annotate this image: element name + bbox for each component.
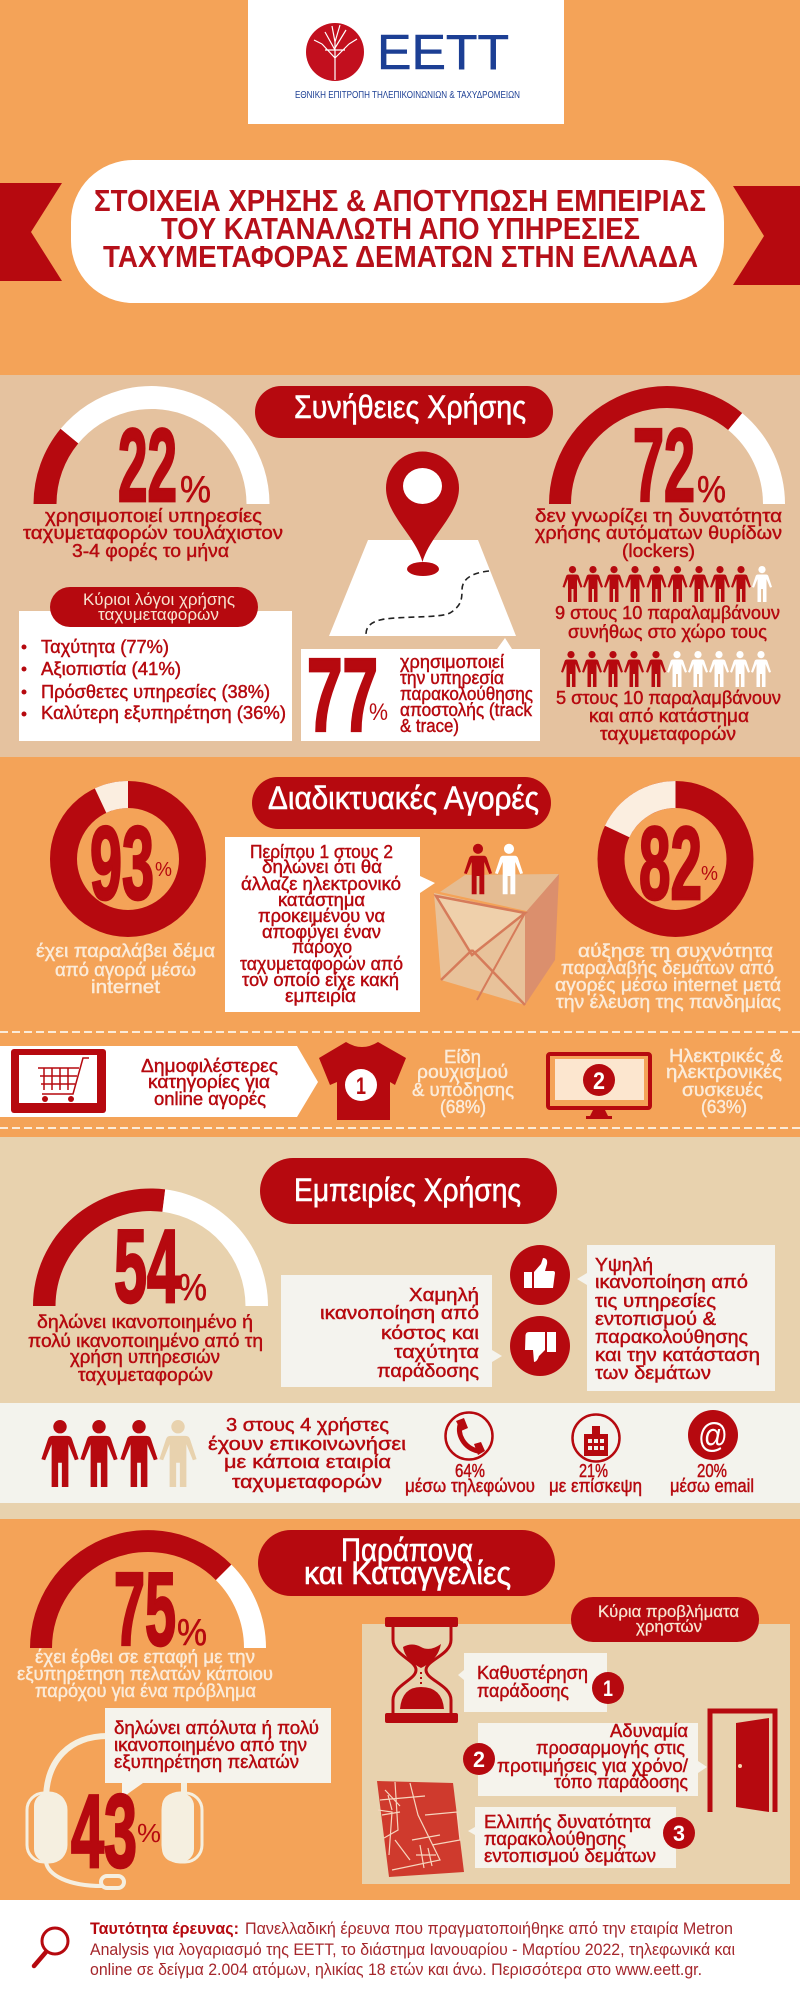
text: 54% description: χρήση υπηρεσιών	[70, 1346, 220, 1367]
banner: popular categories	[0, 1046, 318, 1117]
callout: 43% satisfied with customer service: δηλώνει απόλυτα ή πολύ	[114, 1717, 319, 1738]
callout: 77% track and trace	[301, 638, 540, 754]
title: ΤΟΥ ΚΑΤΑΝΑΛΩΤΗ ΑΠΟ ΥΠΗΡΕΣΙΕΣ	[161, 211, 640, 246]
pictogram: 3 of 4 users	[41, 1420, 197, 1487]
callout: change of store: τον οποίο είχε κακή	[242, 969, 399, 990]
banner: popular categories: online αγορές	[154, 1088, 266, 1109]
text: 22% description: 3-4 φορές το μήνα	[72, 540, 229, 561]
panel: reasons for use: Κύριοι λόγοι χρήσης	[83, 591, 235, 609]
footer text	[90, 1919, 735, 1979]
heading: main problems: χρηστών	[636, 1618, 702, 1636]
text: 5 of 10	[556, 687, 781, 744]
text: 3 of 4 users: με κάποια εταιρία	[224, 1451, 391, 1472]
text: 72% description	[535, 505, 782, 561]
callout: high satisfaction: τις υπηρεσίες	[595, 1290, 716, 1311]
pictogram: 5 of 10	[561, 651, 771, 687]
icon: city map	[377, 1781, 464, 1877]
text: 22% description: χρησιμοποιεί υπηρεσίες	[45, 505, 262, 526]
right ribbon	[733, 186, 800, 285]
footer text: online σε δείγμα 2.004 ατόμων, ηλικίας 18 ετών και άνω. Περισσότερα στο www.eett.gr.	[90, 1960, 702, 1979]
text: 75% description: έχει έρθει σε επαφή με την	[35, 1646, 255, 1667]
logo panel	[248, 0, 564, 124]
text: electronics 63%	[666, 1045, 784, 1117]
callout: delivery delay: παράδοσης	[477, 1680, 569, 1701]
gauge 75%: 75	[114, 1552, 176, 1668]
callout: 77% track and trace: χρησιμοποιεί	[400, 651, 504, 672]
footer text: Πανελλαδική έρευνα που πραγματοποιήθηκε από την εταιρία Metron	[245, 1919, 733, 1938]
illustration: parcel with two people	[434, 844, 559, 1005]
logo wordmark: ΕΕΤΤ	[377, 26, 509, 80]
gauge 72%: %	[697, 469, 726, 511]
text: 75% description: παρόχου για ένα πρόβλημα	[35, 1680, 256, 1701]
gauge 54%: %	[178, 1267, 207, 1309]
callout: 77% track and trace: 77	[307, 638, 378, 754]
stat: 43%: 43	[71, 1774, 137, 1890]
panel: reasons for use: Αξιοπιστία (41%)	[41, 658, 181, 679]
callout: change of store: Περίπου 1 στους 2	[250, 841, 393, 862]
icon: monitor rank 2: 2	[593, 1068, 605, 1095]
gauge 54%: 54	[114, 1209, 180, 1325]
callout: 77% track and trace: & trace)	[400, 715, 459, 736]
callout: high satisfaction: Υψηλή	[595, 1254, 653, 1275]
donut 82%: 82	[639, 806, 702, 922]
stat: 20% by email: μέσω email	[670, 1475, 754, 1496]
text: clothing 68%	[412, 1046, 514, 1117]
text: electronics 63%: ηλεκτρονικές	[666, 1061, 782, 1082]
badge 1	[592, 1672, 624, 1704]
text: 54% description: δηλώνει ικανοποιημένο ή	[37, 1311, 253, 1332]
text: 82% description: παραλαβής δεμάτων από	[561, 957, 774, 978]
panel: reasons for use: Καλύτερη εξυπηρέτηση (36%)	[41, 702, 286, 723]
text: 82% description: την έλευση της πανδημίας	[556, 991, 781, 1012]
callout: change of store: κατάστημα	[278, 889, 365, 910]
callout: high satisfaction	[577, 1245, 775, 1391]
text: 54% description: ταχυμεταφορών	[78, 1364, 213, 1385]
text: 82% description: αγορές μέσω internet μετά	[555, 974, 781, 995]
gauge 22%: %	[180, 469, 211, 511]
callout: change of store	[225, 837, 435, 1012]
text: 3 of 4 users: 3 στους 4 χρήστες	[226, 1414, 389, 1435]
stat: 64% by phone: μέσω τηλεφώνου	[405, 1475, 535, 1496]
callout: high satisfaction: εντοπισμού &	[595, 1308, 717, 1329]
title	[71, 160, 724, 303]
badge 3: 3	[673, 1821, 685, 1846]
gauge 54%	[33, 1188, 268, 1325]
callout: low satisfaction	[281, 1275, 502, 1387]
panel: reasons for use: ταχυμεταφορών	[98, 606, 219, 624]
stat: 21% by visit: με επίσκεψη	[549, 1475, 642, 1496]
badge 2	[463, 1743, 495, 1775]
icon: magnifier	[34, 1928, 68, 1966]
callout: 77% track and trace: %	[369, 699, 388, 726]
gauge 75%	[30, 1530, 266, 1668]
heading	[255, 386, 553, 438]
callout: inability to adjust delivery: προσαρμογής στις	[536, 1737, 685, 1758]
icon: thumbs up	[510, 1245, 570, 1305]
badge 1: 1	[603, 1676, 613, 1701]
text: clothing 68%: (68%)	[440, 1096, 486, 1117]
heading: Παράπονα	[341, 1532, 473, 1568]
icon: building	[572, 1414, 620, 1462]
text: 82% description	[555, 940, 781, 1012]
left ribbon	[0, 183, 62, 281]
text: 3 of 4 users: ταχυμεταφορών	[232, 1471, 382, 1492]
stat: 64% by phone	[405, 1460, 535, 1496]
text: 72% description: χρήσης αυτόματων θυρίδων	[535, 522, 782, 543]
text: 93% description: έχει παραλάβει δέμα	[36, 940, 215, 961]
stat: 64% by phone: 64%	[455, 1460, 485, 1481]
callout: incomplete tracking: παρακολούθησης	[484, 1828, 626, 1849]
text: 75% description: εξυπηρέτηση πελατών κάποιου	[17, 1663, 273, 1684]
icon: email at sign	[688, 1410, 738, 1460]
panel: reasons for use: Ταχύτητα (77%)	[41, 636, 169, 657]
stat: 21% by visit: 21%	[579, 1460, 608, 1481]
pictogram: 9 of 10	[562, 566, 772, 602]
callout: change of store: προκειμένου να	[258, 905, 385, 926]
logo subtitle: ΕΘΝΙΚΗ ΕΠΙΤΡΟΠΗ ΤΗΛΕΠΙΚΟΙΝΩΝΙΩΝ & ΤΑΧΥΔΡΟΜΕΙΩΝ	[295, 89, 520, 101]
icon: t-shirt rank 1: 1	[356, 1073, 366, 1100]
panel: Συνήθειες Χρήσης	[0, 375, 800, 757]
text: electronics 63%: συσκευές	[682, 1079, 763, 1100]
text: clothing 68%: & υπόδησης	[412, 1079, 514, 1100]
donut 93%: %	[155, 859, 172, 881]
callout: incomplete tracking: Ελλιπής δυνατότητα	[484, 1811, 651, 1832]
heading: main problems	[571, 1597, 759, 1642]
text: 72% description: (lockers)	[622, 540, 695, 561]
icon: email at sign: @	[698, 1417, 728, 1455]
panel: Παράπονα και Καταγγελίες	[0, 1519, 800, 1900]
text: 72% description: δεν γνωρίζει τη δυνατότητα	[535, 505, 782, 526]
callout: incomplete tracking: εντοπισμού δεμάτων	[484, 1845, 656, 1866]
callout: high satisfaction: των δεμάτων	[595, 1362, 711, 1383]
callout: 77% track and trace: παρακολούθησης	[400, 683, 533, 704]
icon: hourglass	[385, 1617, 458, 1723]
callout: 43% satisfied with customer service: εξυπηρέτηση πελατών	[114, 1751, 299, 1772]
text: 9 of 10: 9 στους 10 παραλαμβάνουν	[555, 602, 780, 623]
callout: low satisfaction: ταχύτητα	[394, 1341, 479, 1362]
heading: Συνήθειες Χρήσης	[294, 389, 526, 425]
banner: popular categories: κατηγορίες για	[148, 1071, 270, 1092]
text: 22% description: ταχυμεταφορών τουλάχιστον	[23, 522, 283, 543]
icon: thumbs down	[510, 1316, 570, 1376]
callout: 77% track and trace: την υπηρεσία	[400, 667, 504, 688]
heading: main problems: Κύρια προβλήματα	[598, 1603, 739, 1621]
illustration: map sheet with pin	[329, 451, 516, 636]
text: 5 of 10: και από κατάστημα	[589, 705, 749, 726]
text: 54% description: πολύ ικανοποιημένο από τη	[28, 1330, 263, 1351]
stat: 21% by visit	[549, 1460, 642, 1496]
icon: phone	[446, 1412, 492, 1460]
icon: door	[710, 1711, 775, 1812]
callout: 43% satisfied with customer service	[105, 1708, 331, 1798]
heading: Εμπειρίες Χρήσης	[294, 1172, 521, 1208]
text: 75% description	[17, 1646, 273, 1701]
text: clothing 68%: ρουχισμού	[417, 1061, 508, 1082]
gauge 75%: %	[177, 1612, 207, 1654]
text: 5 of 10: ταχυμεταφορών	[600, 723, 736, 744]
panel: Εμπειρίες Χρήσης	[0, 1137, 800, 1519]
callout: change of store: δηλώνει ότι θα	[262, 856, 382, 877]
stat: 20% by email	[670, 1460, 754, 1496]
panel: Διαδικτυακές Αγορές	[0, 757, 800, 1137]
donut 82%	[605, 781, 740, 924]
callout: inability to adjust delivery: Αδυναμία	[610, 1720, 688, 1741]
callout: change of store: εμπειρία	[285, 985, 356, 1006]
text: 5 of 10: 5 στους 10 παραλαμβάνουν	[556, 687, 781, 708]
callout: inability to adjust delivery: τόπο παράδοσης	[554, 1771, 688, 1792]
heading	[258, 1530, 555, 1596]
callout: low satisfaction: κόστος και	[381, 1322, 479, 1343]
gauge 72%	[549, 386, 785, 524]
panel: main problems	[362, 1597, 790, 1884]
text: 93% description: internet	[91, 976, 160, 997]
icon: EETT tree emblem	[306, 23, 364, 81]
text: 22% description	[23, 505, 283, 561]
badge 3	[663, 1817, 695, 1849]
text: 3 of 4 users: έχουν επικοινωνήσει	[208, 1433, 406, 1454]
callout: high satisfaction: παρακολούθησης	[595, 1326, 748, 1347]
text: 82% description: αύξησε τη συχνότητα	[578, 940, 773, 961]
text: 93% description: από αγορά μέσω	[55, 959, 196, 980]
donut 82%: %	[701, 863, 718, 885]
text: electronics 63%: (63%)	[701, 1096, 747, 1117]
callout: low satisfaction: ικανοποίηση από	[320, 1302, 479, 1323]
band: contact channels	[0, 1403, 800, 1503]
callout: incomplete tracking	[468, 1807, 676, 1868]
text: electronics 63%: Ηλεκτρικές &	[669, 1045, 784, 1066]
callout: 77% track and trace: αποστολής (track	[400, 699, 533, 720]
panel: reasons for use: Πρόσθετες υπηρεσίες (38%)	[41, 681, 270, 702]
footer text: Ταυτότητα έρευνας:	[90, 1919, 239, 1938]
callout: inability to adjust delivery: προτιμήσεις για χρόνο/	[497, 1755, 689, 1776]
heading: και Καταγγελίες	[304, 1555, 511, 1591]
icon: headset	[27, 1736, 202, 1888]
callout: change of store: πάροχο	[292, 936, 352, 957]
callout: 43% satisfied with customer service: ικανοποιημένο από την	[114, 1734, 307, 1755]
icon: t-shirt rank 1	[319, 1042, 406, 1120]
footer text: Analysis για λογαριασμό της ΕΕΤΤ, το διάστημα Ιανουαρίου - Μαρτίου 2022, τηλεφωνικά και	[90, 1940, 735, 1959]
stat: 20% by email: 20%	[697, 1460, 727, 1481]
text: 9 of 10	[555, 602, 780, 642]
text: 3 of 4 users	[208, 1414, 406, 1492]
panel: reasons for use	[19, 587, 292, 741]
callout: change of store: ταχυμεταφορών από	[240, 953, 403, 974]
heading: Διαδικτυακές Αγορές	[268, 780, 539, 816]
title: ΤΑΧΥΜΕΤΑΦΟΡΑΣ ΔΕΜΑΤΩΝ ΣΤΗΝ ΕΛΛΑΔΑ	[103, 239, 698, 274]
heading	[252, 777, 551, 829]
donut 93%	[64, 781, 192, 924]
gauge 72%: 72	[633, 408, 695, 524]
stat: 43%: %	[137, 1818, 161, 1848]
callout: high satisfaction: ικανοποίηση από	[595, 1271, 748, 1292]
callout: high satisfaction: και την κατάσταση	[595, 1344, 760, 1365]
donut 93%: 93	[90, 806, 154, 922]
callout: delivery delay: Καθυστέρηση	[477, 1662, 588, 1683]
gauge 22%	[34, 386, 270, 524]
footer: survey identity	[0, 1900, 800, 2000]
callout: inability to adjust delivery	[478, 1720, 707, 1796]
callout: change of store: αποφύγει έναν	[262, 921, 381, 942]
banner: popular categories: Δημοφιλέστερες	[141, 1055, 278, 1076]
callout: low satisfaction: Χαμηλή	[409, 1284, 479, 1305]
callout: low satisfaction: παράδοσης	[377, 1360, 479, 1381]
badge 2: 2	[473, 1747, 485, 1772]
heading	[260, 1158, 557, 1224]
gauge 22%: 22	[118, 408, 177, 524]
text: 54% description	[28, 1311, 263, 1385]
icon: tablet with shopping cart	[11, 1049, 106, 1113]
callout: change of store: άλλαζε ηλεκτρονικό	[241, 873, 401, 894]
text: 93% description	[36, 940, 215, 997]
icon: monitor rank 2	[548, 1054, 650, 1119]
title: ΣΤΟΙΧΕΙΑ ΧΡΗΣΗΣ & ΑΠΟΤΥΠΩΣΗ ΕΜΠΕΙΡΙΑΣ	[94, 183, 706, 218]
callout: delivery delay	[458, 1653, 607, 1712]
text: clothing 68%: Είδη	[444, 1046, 481, 1067]
text: 9 of 10: συνήθως στο χώρο τους	[568, 621, 767, 642]
